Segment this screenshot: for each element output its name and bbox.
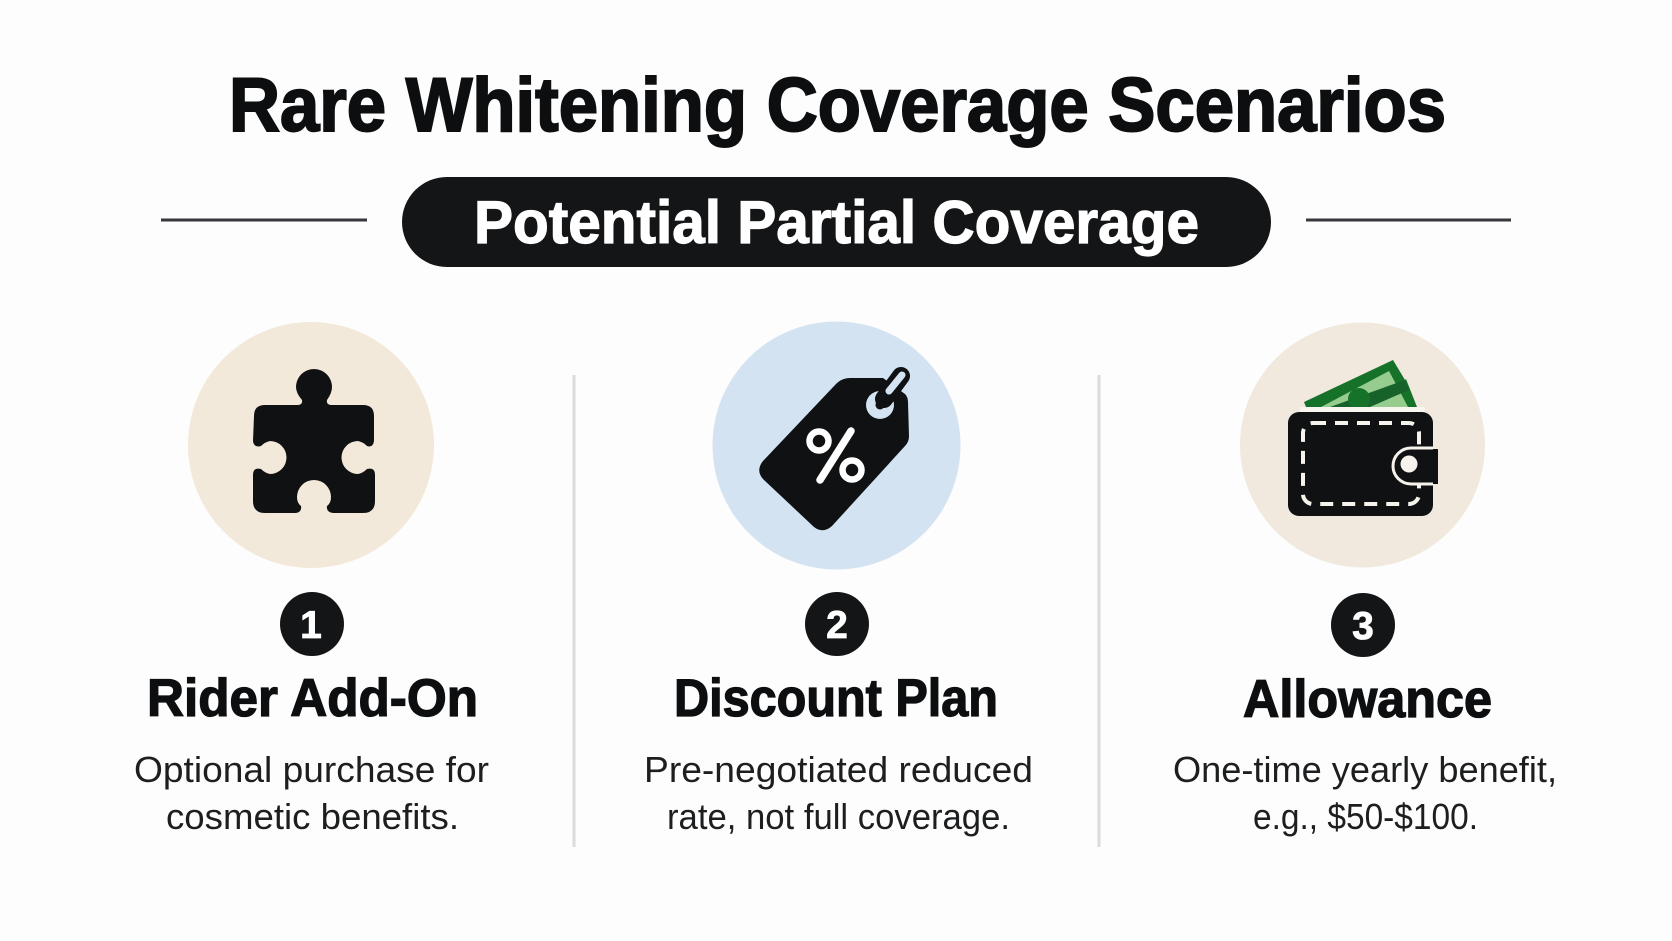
number badge 2: 2 — [826, 604, 848, 647]
icon: discount price tag — [712, 322, 960, 570]
text: allowance description: One-time yearly benefit, — [1173, 749, 1557, 790]
text: discount description — [644, 749, 1033, 837]
subtitle banner: Potential Partial Coverage — [474, 189, 1199, 256]
number badge 3 — [1331, 593, 1395, 657]
text: rider description: cosmetic benefits. — [166, 796, 459, 837]
panel: rider add-on — [134, 322, 489, 837]
text: discount description: rate, not full coverage. — [667, 796, 1010, 837]
number badge 3: 3 — [1352, 605, 1374, 648]
text: rider description — [134, 749, 489, 837]
icon: puzzle piece — [188, 322, 434, 568]
title: Rare Whitening Coverage Scenarios — [229, 63, 1446, 148]
text: rider description: Optional purchase for — [134, 749, 489, 790]
text: allowance description — [1173, 749, 1557, 837]
subtitle banner — [161, 177, 1511, 267]
text: discount description: Pre-negotiated reduced — [644, 749, 1033, 790]
heading: Allowance: Allowance — [1243, 670, 1492, 729]
panel: discount plan — [644, 322, 1033, 837]
heading: Rider Add-On: Rider Add-On — [147, 669, 478, 728]
text: allowance description: e.g., $50-$100. — [1253, 796, 1478, 837]
heading: Discount Plan: Discount Plan — [674, 669, 998, 728]
panel: allowance — [1173, 322, 1557, 837]
number badge 2 — [805, 592, 869, 656]
number badge 1: 1 — [300, 604, 322, 647]
number badge 1 — [280, 592, 344, 656]
icon: wallet with cash — [1240, 322, 1485, 568]
